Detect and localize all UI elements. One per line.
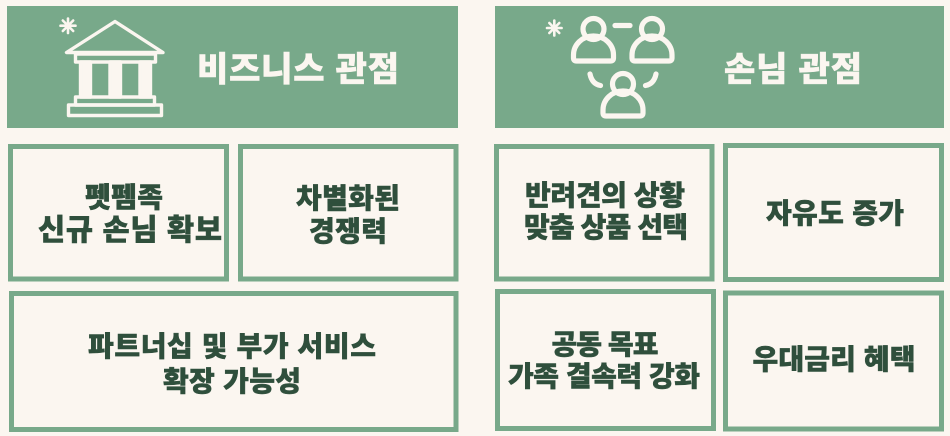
heading: business perspective: 비즈니스 관점: [197, 51, 399, 89]
panel: shared goals: 가족 결속력 강화: [508, 361, 700, 392]
panel: increased freedom: 자유도 증가: [766, 198, 904, 229]
panel: business perspective header: [7, 6, 458, 128]
panel: new pet-family customers: [10, 146, 226, 279]
panel: differentiated competitiveness: 경쟁력: [309, 216, 387, 247]
icon: asterisk: [547, 20, 562, 36]
panel: preferential rate benefit: 우대금리 혜택: [752, 344, 916, 375]
panel: partnerships and add-on services: [12, 294, 456, 430]
panel: partnerships and add-on services: 파트너십 및 부가 서비스: [88, 331, 376, 362]
panel: increased freedom: [726, 146, 942, 280]
panel: differentiated competitiveness: [240, 146, 456, 279]
panel: situation-matched products: [496, 146, 712, 279]
panel: situation-matched products: 반려견의 상황: [525, 180, 685, 211]
panel: shared goals: 공동 목표: [552, 329, 658, 360]
panel: customer perspective header: [495, 6, 944, 128]
icon: bank building: [66, 22, 163, 116]
panel: shared goals: [498, 292, 714, 428]
panel: new pet-family customers: 펫펨족: [85, 182, 163, 213]
heading: customer perspective: 손님 관점: [724, 51, 862, 89]
panel: situation-matched products: 맞춤 상품 선택: [524, 212, 688, 243]
panel: new pet-family customers: 신규 손님 확보: [38, 214, 222, 247]
icon: asterisk: [60, 18, 76, 33]
panel: preferential rate benefit: [726, 293, 942, 429]
icon: three people: [574, 18, 672, 116]
panel: partnerships and add-on services: 확장 가능성: [163, 366, 301, 397]
panel: differentiated competitiveness: 차별화된: [296, 183, 400, 214]
